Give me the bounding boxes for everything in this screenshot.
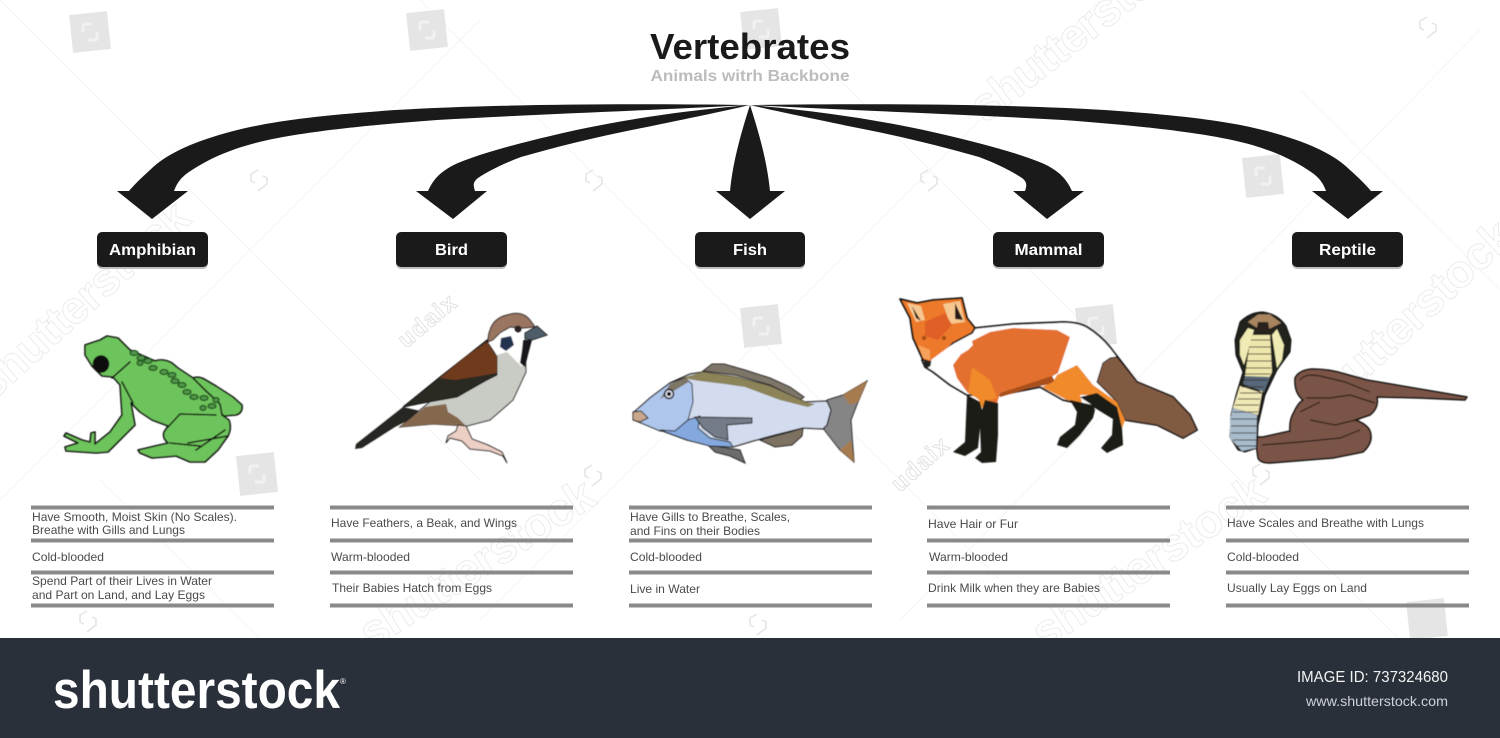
subtitle: Animals witrh Backbone [650,68,850,85]
label: Mammal: Mammal [1014,242,1082,259]
label: Fish [695,232,805,269]
panel: amphibian facts: Spend Part of their Lives in Water [32,574,212,588]
label: Bird [396,232,507,269]
panel: amphibian facts [31,506,274,608]
panel: bird facts: Warm-blooded [331,550,410,564]
panel: bird facts: Have Feathers, a Beak, and Wings [331,516,517,530]
panel: amphibian facts: Cold-blooded [32,550,104,564]
panel: fish facts: Live in Water [630,582,700,596]
arrow: to amphibian [117,104,750,219]
watermark layer: udaix [886,431,955,497]
watermark layer: udaix [393,289,462,354]
panel: reptile facts: Usually Lay Eggs on Land [1227,581,1367,595]
panel: mammal facts: Have Hair or Fur [928,517,1018,531]
panel: fish facts: and Fins on their Bodies [630,524,760,538]
footer logo: shutterstock [53,661,340,720]
panel: fish facts: Cold-blooded [630,550,702,564]
panel: fish facts: Have Gills to Breathe, Scales, [630,510,790,524]
panel: amphibian facts: Have Smooth, Moist Skin (No Scales). [32,510,237,524]
panel: reptile facts: Cold-blooded [1227,550,1299,564]
icon: bird [355,313,547,463]
footer bar [0,638,1500,738]
arrow: to reptile [750,104,1383,219]
arrows from title to five classes [117,104,1383,219]
panel: reptile facts: Have Scales and Breathe with Lungs [1227,516,1424,530]
label: Reptile [1292,232,1403,269]
panel: mammal facts: Drink Milk when they are Babies [928,581,1100,595]
icon: cobra [1230,312,1467,463]
label: Amphibian: Amphibian [109,242,196,259]
panel: reptile facts [1226,506,1469,608]
label: Reptile: Reptile [1319,242,1376,259]
panel: amphibian facts: and Part on Land, and Lay Eggs [32,588,205,602]
icon: fox [900,298,1197,463]
panel: mammal facts [927,506,1170,608]
arrow: to mammal [750,105,1084,219]
label: Fish: Fish [733,242,767,259]
panel: amphibian facts: Breathe with Gills and Lungs [32,523,185,537]
watermark layer: shutterstock [1022,464,1275,658]
icon: fish [633,364,867,463]
arrow: to fish [716,105,785,219]
watermark layer: shutterstock [349,468,604,658]
registered mark: ® [340,677,346,686]
title: Vertebrates [650,26,850,67]
label: Amphibian [97,232,208,269]
website: www.shutterstock.com [1305,693,1448,709]
image id: IMAGE ID: 737324680 [1297,669,1448,686]
panel: fish facts [629,506,872,608]
icon: frog [64,336,242,462]
label: Mammal [993,232,1104,269]
label: Bird: Bird [435,242,468,259]
panel: bird facts: Their Babies Hatch from Eggs [332,581,492,595]
panel: bird facts [330,506,573,608]
arrow: to bird [416,105,750,219]
panel: mammal facts: Warm-blooded [929,550,1008,564]
